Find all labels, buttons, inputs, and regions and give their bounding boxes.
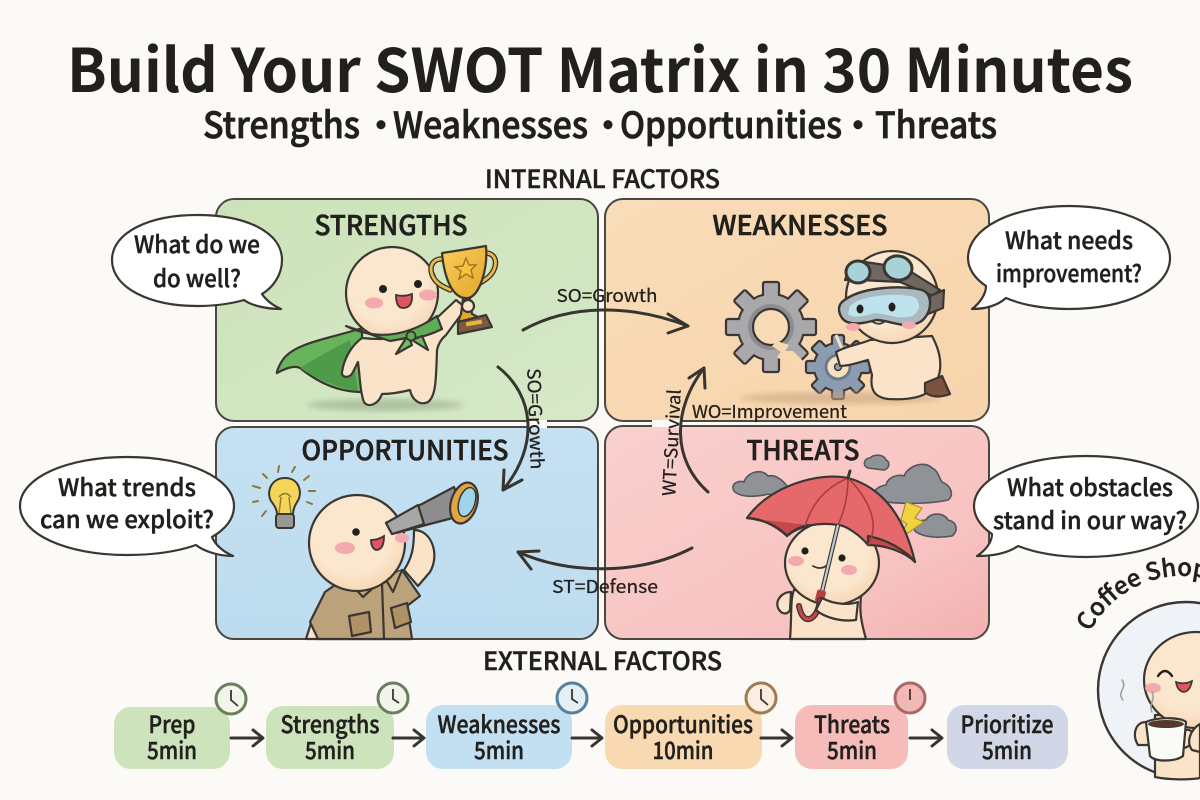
arrow: SO=Growth horizontal: SO=Growth xyxy=(556,282,658,308)
timeline step: strengths: 5min xyxy=(305,731,355,766)
timeline step: strengths: Strengths xyxy=(280,705,380,740)
icon: small broken gear xyxy=(806,335,870,399)
arrow: step 5 xyxy=(910,730,942,746)
icon: clock strengths xyxy=(378,683,408,713)
icon: clock threats xyxy=(895,683,925,713)
icon: storm clouds xyxy=(733,455,956,537)
timeline step: prep: Prep xyxy=(148,705,196,740)
panel: weaknesses xyxy=(605,199,989,421)
arrow: WT=Survival xyxy=(652,368,708,497)
speech bubble: weaknesses: improvement? xyxy=(996,254,1142,289)
arrow: step 4 xyxy=(761,730,792,746)
icon: character with telescope xyxy=(306,479,483,639)
timeline step: prioritize xyxy=(947,705,1068,769)
icon: clock opportunities xyxy=(746,683,776,713)
timeline step: prep: 5min xyxy=(147,731,197,766)
heading: threats: THREATS xyxy=(746,429,860,468)
subtitle: Weaknesses xyxy=(393,97,588,149)
arrow: step 3 xyxy=(572,730,602,746)
timeline step: threats: Threats xyxy=(814,705,890,740)
timeline step: opportunities: Opportunities xyxy=(613,705,753,740)
icon: character with umbrella xyxy=(747,471,915,639)
icon: character with goggles xyxy=(740,251,950,404)
subtitle: • xyxy=(590,97,626,149)
title: Build Your SWOT Matrix in 30 Minutes xyxy=(67,23,1133,110)
timeline step: opportunities: 10min xyxy=(652,731,714,766)
speech bubble: threats xyxy=(974,456,1198,557)
icon: light bulb xyxy=(253,466,315,528)
arrow: ST=Defense: ST=Defense xyxy=(552,573,658,599)
heading: opportunities: OPPORTUNITIES xyxy=(302,429,508,468)
heading: strengths: STRENGTHS xyxy=(314,204,468,243)
speech bubble: weaknesses: What needs xyxy=(1005,221,1133,256)
icon: large broken gear xyxy=(726,282,816,372)
arrow: WT=Survival: WT=Survival xyxy=(655,389,687,497)
subtitle: • xyxy=(363,97,399,149)
icon: character with coffee cup xyxy=(1121,632,1200,779)
timeline step: prep xyxy=(114,705,230,769)
timeline step: threats xyxy=(795,705,908,769)
icon: superhero character with trophy xyxy=(277,246,496,411)
icon: clock weaknesses xyxy=(557,683,587,713)
speech bubble: weaknesses xyxy=(968,206,1170,309)
coffee shop callout xyxy=(1078,558,1200,780)
icon: clock prep xyxy=(216,684,246,714)
icon: trophy xyxy=(431,246,496,334)
subtitle: • xyxy=(840,97,876,149)
subtitle: Threats xyxy=(875,97,997,149)
arrow: step 1 xyxy=(231,730,263,746)
arrow: step 2 xyxy=(393,730,424,746)
subtitle xyxy=(203,97,997,149)
label: WO=Improvement: WO=Improvement xyxy=(692,398,847,424)
timeline step: weaknesses xyxy=(426,705,572,769)
timeline step: prioritize: Prioritize xyxy=(960,705,1054,740)
subtitle: Opportunities xyxy=(620,97,842,149)
arrow: SO=Growth horizontal xyxy=(523,282,688,333)
arrow: SO=Growth vertical xyxy=(498,367,551,490)
speech bubble: strengths: What do we xyxy=(134,225,260,260)
icon: lightning bolt xyxy=(896,502,924,541)
timeline step: weaknesses: 5min xyxy=(474,731,524,766)
timeline step: prioritize: 5min xyxy=(982,731,1032,766)
timeline step: opportunities xyxy=(605,705,762,769)
panel: strengths xyxy=(216,199,598,421)
speech bubble: threats: What obstacles xyxy=(1007,468,1173,503)
timeline step: weaknesses: Weaknesses xyxy=(438,705,560,740)
timeline step: strengths xyxy=(266,705,394,769)
axis label: external factors: EXTERNAL FACTORS xyxy=(483,642,722,678)
axis label: internal factors: INTERNAL FACTORS xyxy=(485,160,720,196)
panel: threats xyxy=(605,426,989,639)
speech bubble: threats: stand in our way? xyxy=(993,501,1187,536)
speech bubble: opportunities xyxy=(20,457,234,556)
arrow: SO=Growth vertical: SO=Growth xyxy=(521,368,551,470)
panel: opportunities xyxy=(216,427,598,639)
subtitle: Strengths xyxy=(203,97,360,149)
speech bubble: opportunities: can we exploit? xyxy=(40,500,214,535)
speech bubble: strengths: do well? xyxy=(153,259,241,294)
timeline step: threats: 5min xyxy=(827,731,877,766)
speech bubble: strengths xyxy=(112,215,282,309)
speech bubble: opportunities: What trends xyxy=(58,468,196,503)
heading: weaknesses: WEAKNESSES xyxy=(712,204,888,243)
arrow: ST=Defense xyxy=(518,548,692,599)
